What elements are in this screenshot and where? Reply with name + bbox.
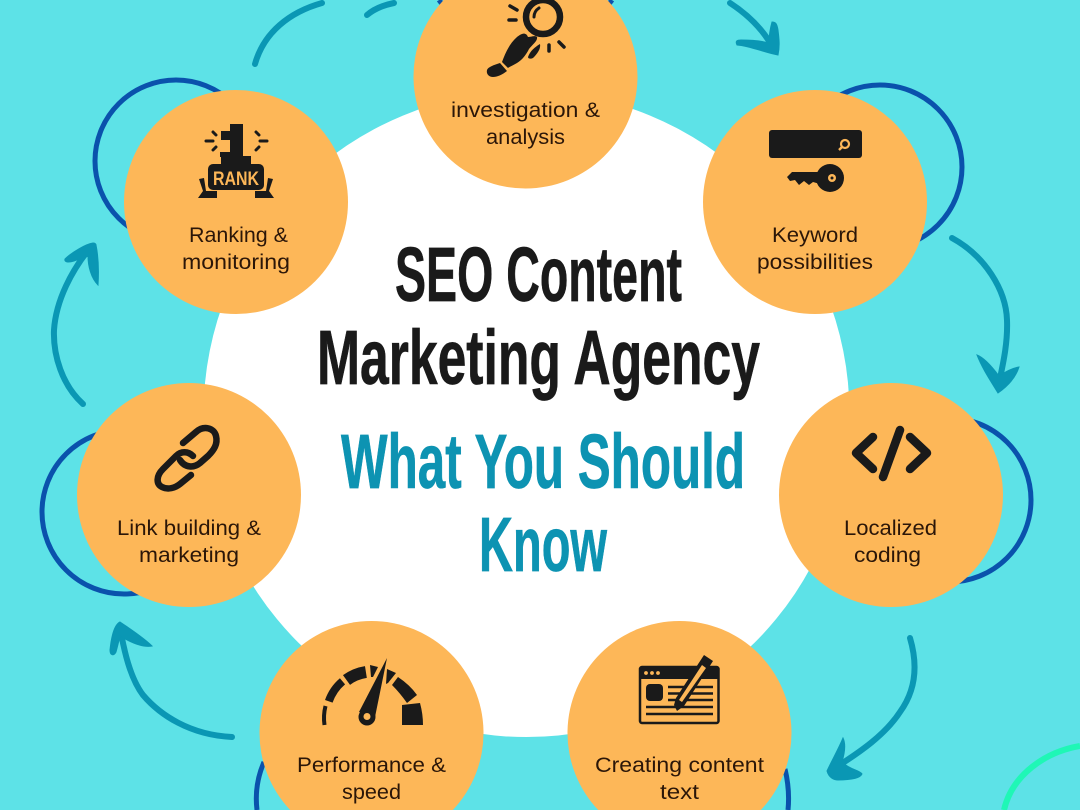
label: [757, 223, 873, 274]
icon: chain link: [158, 428, 217, 488]
title line 1: SEO Content: [395, 232, 682, 318]
icon: rank one trophy: [198, 124, 274, 198]
subtitle line 2: Know: [479, 502, 608, 588]
icon: speed gauge: [324, 658, 423, 726]
label: [182, 223, 290, 274]
label: analysis: [486, 125, 565, 149]
label: text: [660, 780, 699, 804]
step: investigation and analysis: [414, 0, 638, 189]
arrow: bottom left: [110, 622, 232, 737]
arrow: right: [952, 238, 1019, 393]
label: Ranking &: [189, 223, 288, 247]
label: coding: [854, 543, 921, 567]
step: creating content text: [567, 621, 791, 810]
label: investigation &: [451, 98, 600, 122]
label: monitoring: [182, 250, 290, 274]
label: Performance &: [297, 753, 446, 777]
label: [844, 516, 937, 567]
arrow: left: [54, 243, 98, 404]
arrow: bottom right: [827, 638, 915, 780]
icon: content editor: [640, 655, 718, 723]
title line 2: Marketing Agency: [317, 315, 760, 401]
icon: rank one trophy: RANK: [213, 169, 259, 190]
label: Link building &: [117, 516, 261, 540]
label: [117, 516, 261, 567]
green corner arc: [1004, 746, 1080, 810]
step: performance and speed: [259, 621, 483, 810]
label: [595, 753, 764, 804]
arrow: top right: [730, 3, 779, 55]
central white circle: [204, 91, 850, 737]
step: keyword possibilities: [703, 90, 927, 314]
subtitle line 1: What You Should: [341, 419, 745, 505]
step: localized coding: [779, 383, 1003, 607]
icon: code brackets: [856, 430, 927, 477]
label: marketing: [139, 543, 239, 567]
label: possibilities: [757, 250, 873, 274]
arrow: top left: [255, 3, 394, 64]
icon: search bar and key: [769, 130, 862, 192]
icon: magnifier and hand: [487, 0, 564, 77]
label: speed: [342, 780, 401, 804]
label: Localized: [844, 516, 937, 540]
step: ranking and monitoring: [124, 90, 348, 314]
subtitle: [341, 419, 745, 588]
label: Creating content: [595, 753, 764, 777]
label: [451, 98, 600, 149]
title: [317, 232, 760, 401]
label: [297, 753, 446, 804]
step: link building and marketing: [77, 383, 301, 607]
label: Keyword: [772, 223, 858, 247]
